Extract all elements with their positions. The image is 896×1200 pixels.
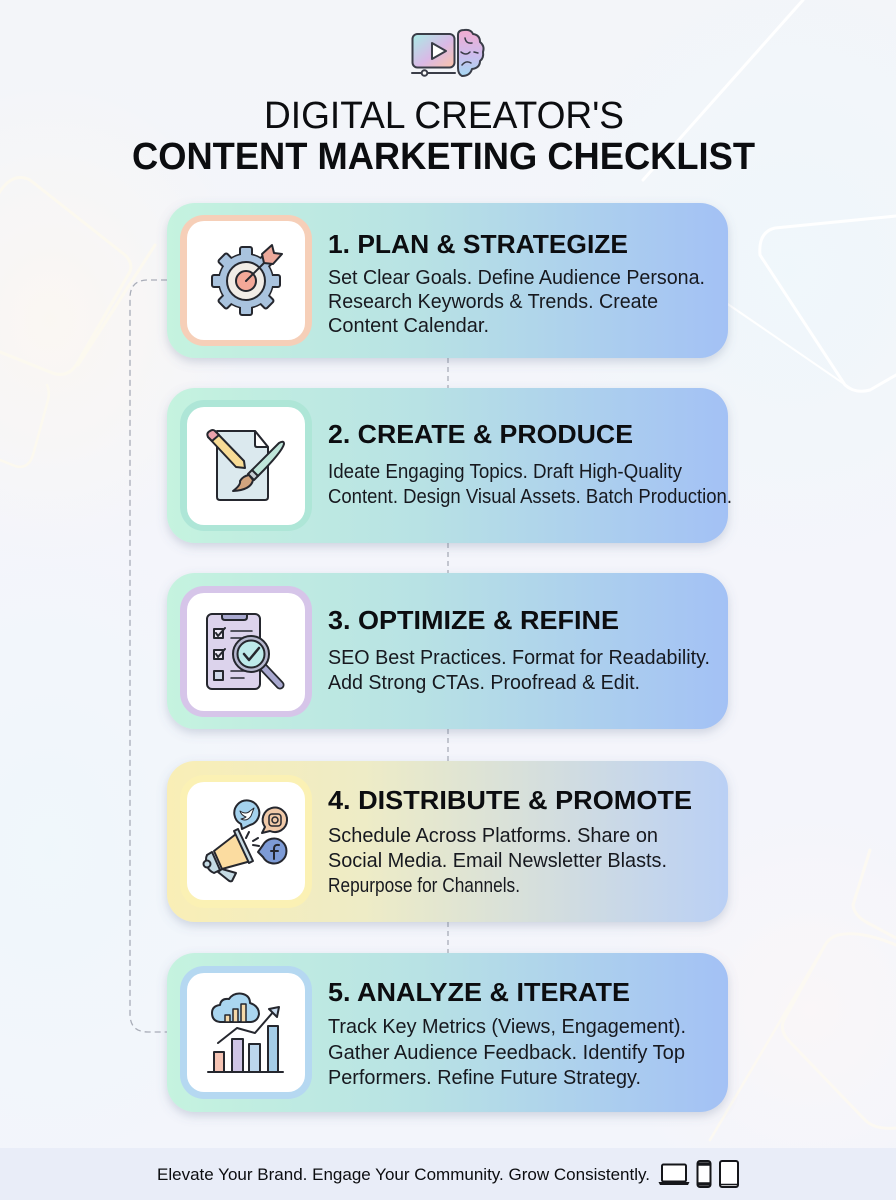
body text [328,647,710,694]
heading: 5. ANALYZE & ITERATE [328,977,630,1007]
title [132,95,755,178]
footer band [0,1148,896,1200]
body text: Social Media. Email Newsletter Blasts. [328,850,667,872]
panel: step 4 distribute and promote [167,761,728,922]
body text: SEO Best Practices. Format for Readability. [328,647,710,669]
icon: megaphone with social bubbles [204,800,287,881]
title: DIGITAL CREATOR'S [264,95,624,137]
body text: Add Strong CTAs. Proofread & Edit. [328,672,640,694]
connector: dashed side bracket [130,280,167,1032]
panel: step 3 optimize and refine [167,573,728,729]
icon: cloud and bar chart [208,994,283,1072]
body text: Performers. Refine Future Strategy. [328,1067,641,1089]
body text: Set Clear Goals. Define Audience Persona. [328,267,705,289]
heading: 2. CREATE & PRODUCE [328,419,633,449]
panel: step 2 create and produce [167,388,732,543]
panel: step 1 plan and strategize [167,203,728,358]
body text [328,461,732,508]
connector: dashed centre links [447,358,449,953]
body text: Repurpose for Channels. [328,875,520,897]
icon: checklist with magnifier [207,614,280,689]
heading: 4. DISTRIBUTE & PROMOTE [328,785,692,815]
heading: 1. PLAN & STRATEGIZE [328,229,628,259]
icon: document, pencil and paintbrush [207,430,284,500]
title: CONTENT MARKETING CHECKLIST [132,136,755,178]
body text: Gather Audience Feedback. Identify Top [328,1042,685,1064]
body text [328,825,667,897]
icon: laptop [658,1164,690,1185]
footer tagline: Elevate Your Brand. Engage Your Community. Grow Consistently. [157,1165,650,1184]
icon: phone [698,1161,710,1187]
body text: Content. Design Visual Assets. Batch Production. [328,486,732,508]
icon: gear with target and arrow [212,245,282,315]
body text [328,1016,686,1089]
body text: Track Key Metrics (Views, Engagement). [328,1016,686,1038]
icon: tablet [720,1161,738,1187]
body text: Ideate Engaging Topics. Draft High-Quality [328,461,682,483]
body text: Schedule Across Platforms. Share on [328,825,658,847]
body text: Research Keywords & Trends. Create [328,291,658,313]
heading: 3. OPTIMIZE & REFINE [328,605,619,635]
logo icon: video player and brain [412,30,484,76]
body text [328,267,705,337]
panel: step 5 analyze and iterate [167,953,728,1112]
body text: Content Calendar. [328,315,489,337]
